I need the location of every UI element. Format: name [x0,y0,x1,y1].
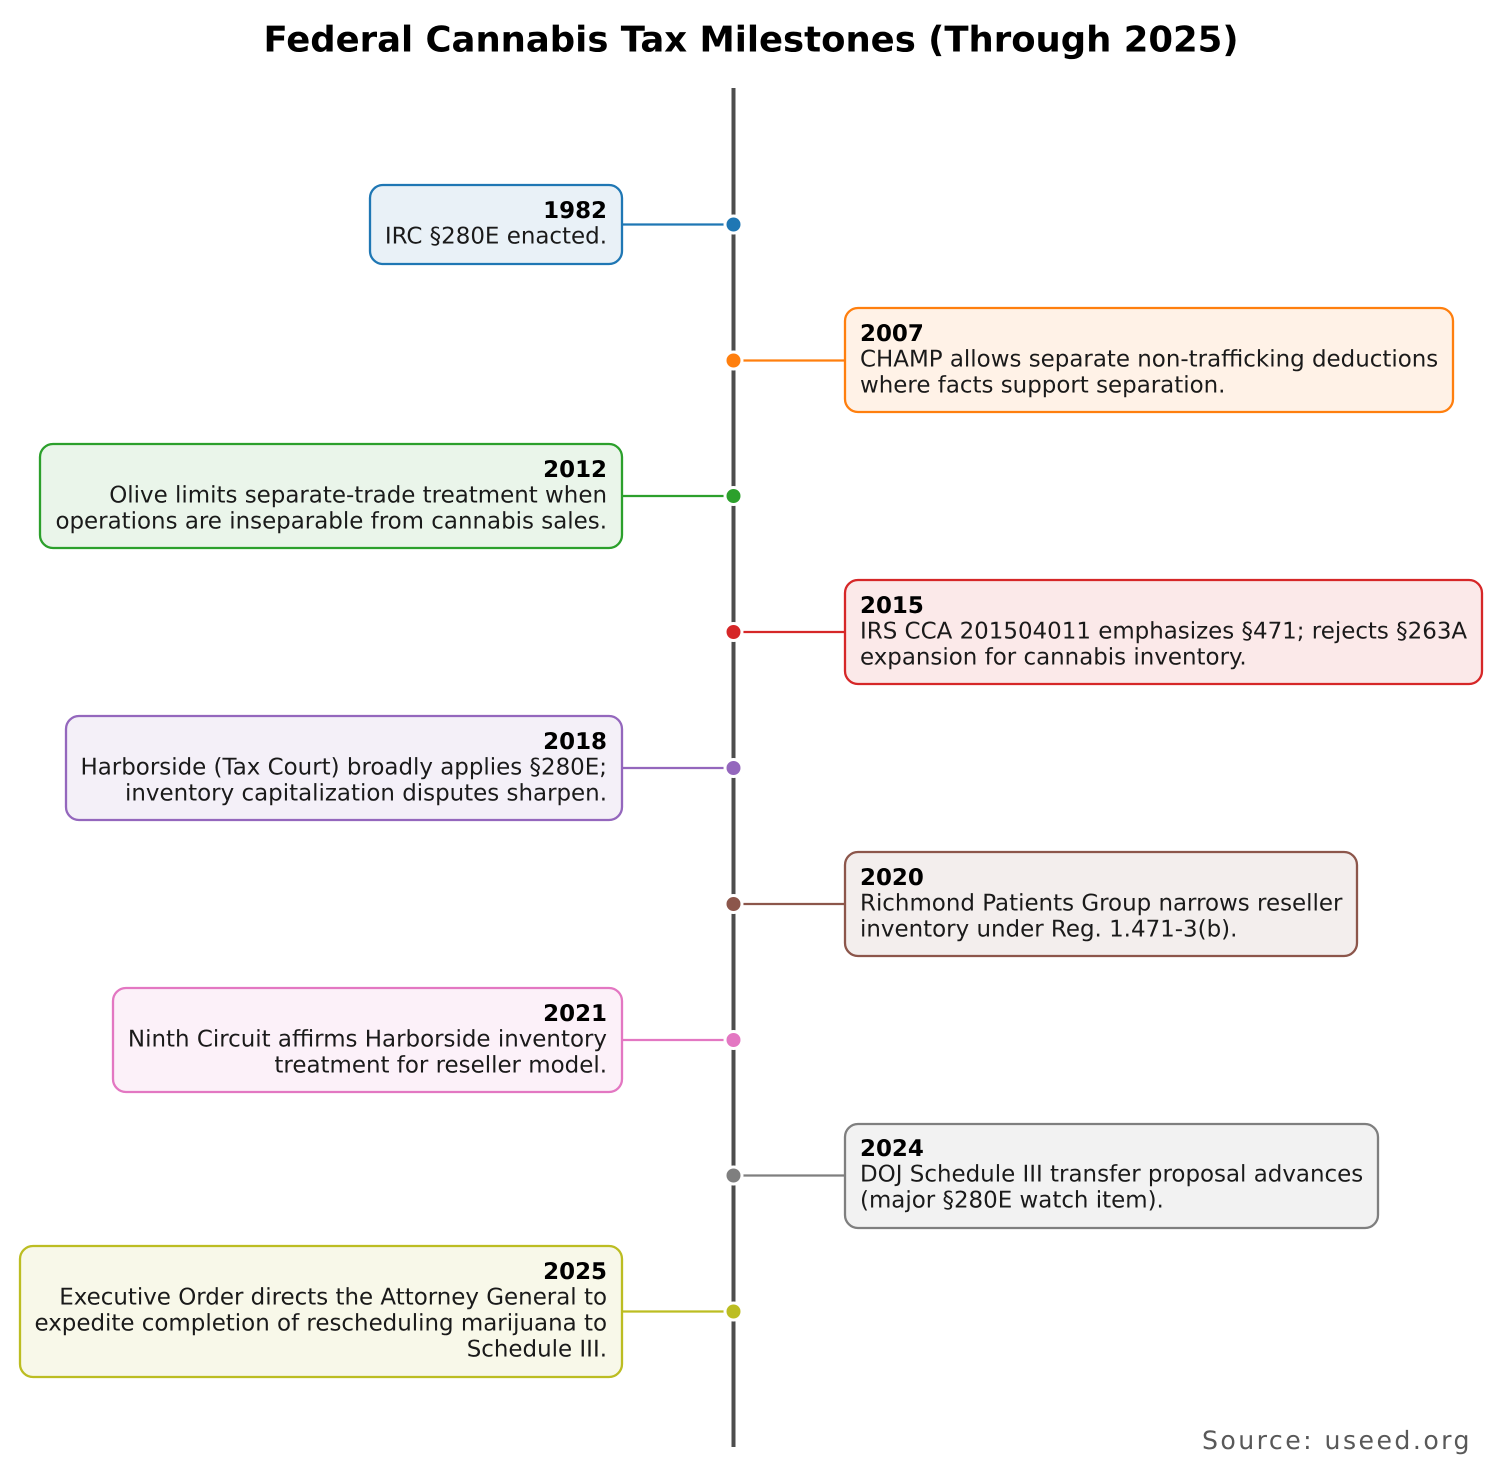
milestone: 2015: IRS CCA 201504011 emphasizes §471; rejects §263A [860,618,1467,644]
milestone: 2024: 2024 [860,1136,924,1162]
milestone: 1982: IRC §280E enacted. [385,224,607,250]
milestone: 2024: (major §280E watch item). [860,1188,1164,1214]
source note: Source: useed.org [1202,1426,1472,1455]
milestone: 2015: 2015 [860,593,924,619]
milestone: 2024 [725,1124,1378,1228]
milestone: 2007 [725,308,1453,412]
title: Federal Cannabis Tax Milestones (Through 2025) [263,20,1239,60]
milestone: 2020 [725,852,1357,956]
milestone: 2018: inventory capitalization disputes sharpen. [125,780,607,806]
milestone: 2007: 2007 [860,321,924,347]
milestone: 2007: where facts support separation. [860,372,1225,398]
milestone: 2012: 2012 [543,457,607,483]
milestone: 2018 [66,716,742,820]
milestone: 2025: Schedule III. [467,1336,607,1362]
milestone: 2018: 2018 [543,729,607,755]
milestone: 2015: expansion for cannabis inventory. [860,644,1247,670]
milestone: 2020: 2020 [860,865,924,891]
milestone: 2021: Ninth Circuit affirms Harborside inventory [128,1026,607,1052]
milestone: 2025: 2025 [543,1259,607,1285]
milestone: 2012: operations are inseparable from cannabis sales. [55,508,607,534]
milestone: 2012 [40,444,742,548]
timeline axis [732,88,736,1447]
milestone: 2021: treatment for reseller model. [274,1052,607,1078]
milestone: 2012: Olive limits separate-trade treatment when [109,482,607,508]
milestone: 2020: inventory under Reg. 1.471-3(b). [860,916,1237,942]
milestone: 2007: CHAMP allows separate non-trafficking deductions [860,346,1438,372]
milestone: 2018: Harborside (Tax Court) broadly applies §280E; [80,754,607,780]
milestone: 2025 [20,1246,742,1377]
milestone: 2025: expedite completion of rescheduling marijuana to [34,1310,607,1336]
milestone: 2024: DOJ Schedule III transfer proposal advances [860,1162,1363,1188]
milestone: 2021 [113,988,742,1092]
milestone: 1982: 1982 [543,198,607,224]
milestone: 2021: 2021 [543,1001,607,1027]
milestone: 1982 [370,185,742,264]
milestone: 2015 [725,580,1482,684]
milestone: 2025: Executive Order directs the Attorney General to [59,1284,607,1310]
milestone: 2020: Richmond Patients Group narrows reseller [860,890,1343,916]
